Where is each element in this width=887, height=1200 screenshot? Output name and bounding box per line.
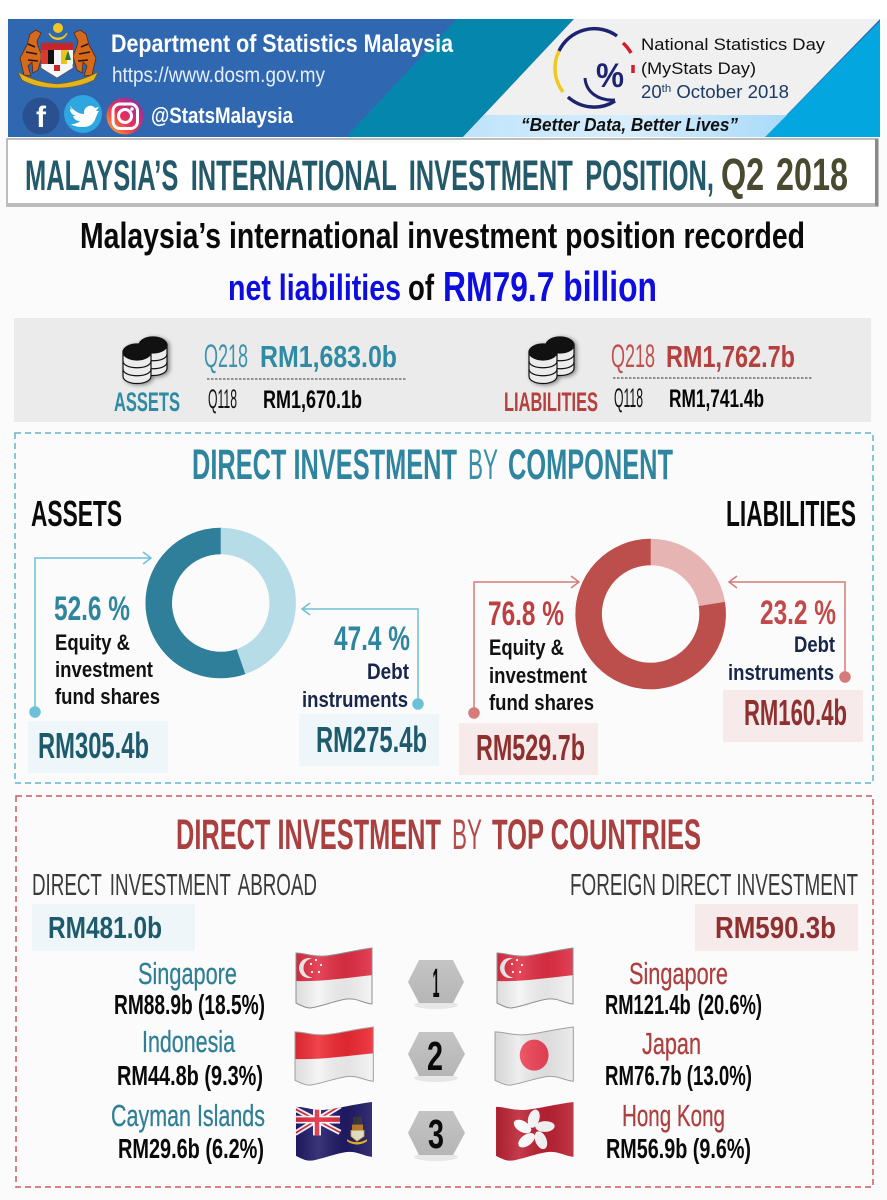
liabilities debt text: instruments [728, 660, 834, 685]
flag: Singapore right [496, 948, 574, 1010]
national statistics day text [641, 35, 826, 102]
value box: RM305.4b: RM305.4b [38, 725, 149, 766]
value box: RM529.7b: RM529.7b [476, 727, 585, 768]
assets equity text: fund shares [55, 684, 160, 709]
section heading: BY [468, 441, 498, 489]
rank 3 right: Hong Kong: RM56.9b (9.6%) [606, 1133, 751, 1164]
assets Q118 [208, 384, 362, 414]
rank 2 right: Japan [605, 1026, 752, 1091]
rank 2 left: Indonesia: Indonesia [142, 1024, 236, 1059]
header banner [8, 19, 880, 137]
value box: RM275.4b: RM275.4b [316, 719, 427, 760]
liabilities label: LIABILITIES [504, 387, 598, 417]
rank 3 right: Hong Kong: Hong Kong [622, 1098, 725, 1133]
rank 2 right: Japan: Japan [642, 1026, 701, 1061]
value box: RM305.4b [28, 721, 168, 773]
liabilities Q218 [611, 338, 795, 374]
liabilities equity text [488, 595, 594, 715]
national statistics day text: th [662, 83, 671, 95]
abroad heading: DIRECT INVESTMENT ABROAD [32, 867, 317, 902]
assets debt text [302, 620, 410, 712]
liabilities equity text: 76.8 % [488, 595, 564, 633]
tagline strip [463, 115, 787, 137]
value box: RM160.4b [723, 690, 863, 742]
value box: RM481.0b [32, 904, 195, 951]
rank badge 1 [408, 960, 464, 1009]
assets equity text: 52.6 % [54, 590, 130, 628]
icon: facebook [22, 98, 60, 134]
section heading: BY [452, 811, 482, 859]
liabilities debt text [728, 594, 836, 685]
liabilities equity text: Equity & [489, 635, 564, 660]
value box: RM590.3b [695, 904, 858, 951]
liabilities debt text: 23.2 % [760, 594, 836, 632]
rank badge 3 [408, 1111, 465, 1161]
rank 2 right: Japan: RM76.7b (13.0%) [605, 1060, 752, 1091]
assets equity text [54, 590, 160, 709]
assets debt text: instruments [302, 687, 408, 712]
flag: Indonesia [294, 1027, 374, 1087]
rank 1 right: Singapore [605, 956, 762, 1020]
liabilities Q118 [614, 383, 764, 413]
value box: RM529.7b [459, 723, 598, 775]
assets Q218 [204, 338, 397, 374]
rank 1 left: Singapore: Singapore [138, 956, 237, 991]
assets equity text: investment [55, 657, 154, 682]
assets debt text: Debt [367, 659, 410, 684]
icon: instagram [106, 98, 144, 134]
value box: RM590.3b: RM590.3b [715, 910, 836, 945]
donut: assets [159, 541, 283, 665]
flag: Japan [494, 1027, 574, 1087]
flag: Hong Kong [495, 1102, 575, 1163]
rank badge 2 [408, 1032, 465, 1082]
liabilities Q218: RM1,762.7b [666, 339, 795, 374]
panel: direct investment by component [15, 433, 873, 783]
assets Q118: Q118 [208, 384, 237, 414]
headline: net liabilities [228, 267, 401, 308]
arrow: debt liabilities [729, 576, 850, 682]
rank 3 right: Hong Kong [606, 1098, 751, 1164]
liabilities Q218: Q218 [611, 338, 655, 374]
assets label: ASSETS [114, 387, 180, 417]
rank 2 left: Indonesia [117, 1024, 263, 1091]
assets Q218: Q218 [204, 338, 248, 374]
arrow: equity assets [30, 552, 151, 717]
rank 2 left: Indonesia: RM44.8b (9.3%) [117, 1060, 263, 1091]
panel: totals [14, 318, 871, 422]
tagline strip: “Better Data, Better Lives” [521, 115, 738, 135]
rank badge 3: 3 [428, 1111, 444, 1157]
header title: Department of Statistics Malaysia [111, 30, 454, 58]
icon: coins assets [123, 337, 167, 384]
assets Q218: RM1,683.0b [260, 339, 397, 374]
flag: Singapore left [295, 948, 373, 1010]
title bar [7, 139, 878, 206]
rank 3 left: Cayman Islands [111, 1098, 265, 1164]
flag: Cayman Islands [295, 1102, 373, 1163]
section heading: COMPONENT [508, 441, 673, 489]
icon: facebook: f [36, 101, 47, 134]
headline [80, 215, 805, 310]
icon: coat of arms [18, 23, 98, 88]
rank 1 left: Singapore: RM88.9b (18.5%) [114, 989, 265, 1020]
icon: MyStats logo: % [596, 57, 624, 95]
liabilities equity text: fund shares [489, 690, 594, 715]
arrow: debt assets [302, 603, 423, 709]
liabilities debt text: Debt [794, 632, 836, 657]
assets Q118: RM1,670.1b [263, 386, 362, 414]
liabilities Q118: Q118 [614, 383, 643, 413]
value box: RM481.0b: RM481.0b [48, 910, 162, 945]
rank 3 left: Cayman Islands: Cayman Islands [111, 1098, 265, 1133]
icon: coins liabilities [529, 337, 574, 384]
section heading: DIRECT INVESTMENT [192, 441, 457, 489]
rank 3 left: Cayman Islands: RM29.6b (6.2%) [118, 1133, 264, 1164]
assets equity text: Equity & [55, 630, 130, 655]
value box: RM275.4b [299, 714, 439, 766]
liabilities Q118: RM1,741.4b [669, 385, 764, 413]
rank badge 2: 2 [427, 1033, 443, 1079]
section heading: TOP COUNTRIES [492, 811, 701, 859]
national statistics day text: 20 [641, 82, 661, 102]
rank 1 right: Singapore: RM121.4b (20.6%) [605, 989, 762, 1020]
donut: liabilities [589, 552, 713, 676]
headline: of [408, 267, 435, 308]
national statistics day text: October 2018 [671, 82, 789, 102]
rank badge 1: 1 [432, 960, 440, 1006]
section heading: DIRECT INVESTMENT [176, 811, 441, 859]
national statistics day text: (MyStats Day) [641, 59, 756, 78]
national statistics day text: National Statistics Day [641, 35, 826, 54]
icon: MyStats logo [555, 29, 633, 107]
panel: direct investment by top countries [16, 796, 873, 1187]
liabilities equity text: investment [489, 663, 588, 688]
assets subheading: ASSETS [31, 493, 122, 534]
icon: twitter [64, 95, 102, 133]
assets debt text: 47.4 % [334, 620, 410, 658]
rank 1 right: Singapore: Singapore [629, 956, 728, 991]
rank 1 left: Singapore [114, 956, 265, 1020]
social handle: @StatsMalaysia [151, 103, 294, 128]
arrow: equity liabilities [469, 576, 579, 718]
header url: https://www.dosm.gov.my [112, 64, 325, 87]
headline: RM79.7 billion [443, 263, 657, 310]
